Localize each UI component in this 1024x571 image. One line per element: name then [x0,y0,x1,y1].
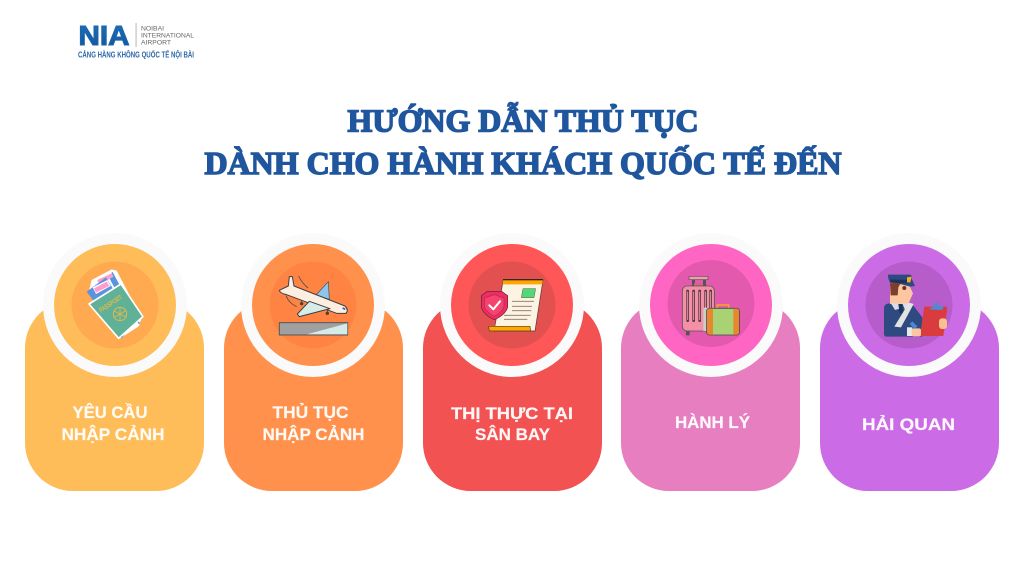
panel: hành lý [621,233,800,491]
icon: visa document with shield [481,279,543,331]
label [62,403,164,444]
icon: passport: PASSPORT [98,294,124,314]
icon: airplane landing [279,276,348,335]
logo [78,20,195,60]
title: HƯỚNG DẪN THỦ TỤC [348,102,698,138]
icon: luggage [682,276,739,335]
panel: yêu cầu nhập cảnh [25,233,204,491]
icon: customs officer [884,275,947,337]
logo tagline: CẢNG HÀNG KHÔNG QUỐC TẾ NỘI BÀI [78,48,194,60]
panel: thủ tục nhập cảnh [224,233,403,491]
label: NHẬP CẢNH [262,425,364,444]
title: DÀNH CHO HÀNH KHÁCH QUỐC TẾ ĐẾN [204,145,842,181]
label: SÂN BAY [475,425,550,444]
label: HÀNH LÝ [675,413,750,432]
label: NHẬP CẢNH [62,425,164,444]
label: THỊ THỰC TẠI [451,405,573,423]
logo mark: NIA: NIA [78,20,130,51]
label: THỦ TỤC [272,403,349,422]
title [204,102,842,181]
label [451,405,573,444]
panel: thị thực tại sân bay [423,233,602,491]
logo airport name: NOIBAI [141,26,164,32]
icon: passport [87,269,143,338]
label: HẢI QUAN [862,415,955,434]
logo airport name: AIRPORT [141,40,171,46]
panel: hải quan [820,233,999,491]
label: YÊU CẦU [72,403,148,422]
logo airport name [141,26,195,46]
label [262,403,364,444]
logo airport name: INTERNATIONAL [141,34,195,40]
